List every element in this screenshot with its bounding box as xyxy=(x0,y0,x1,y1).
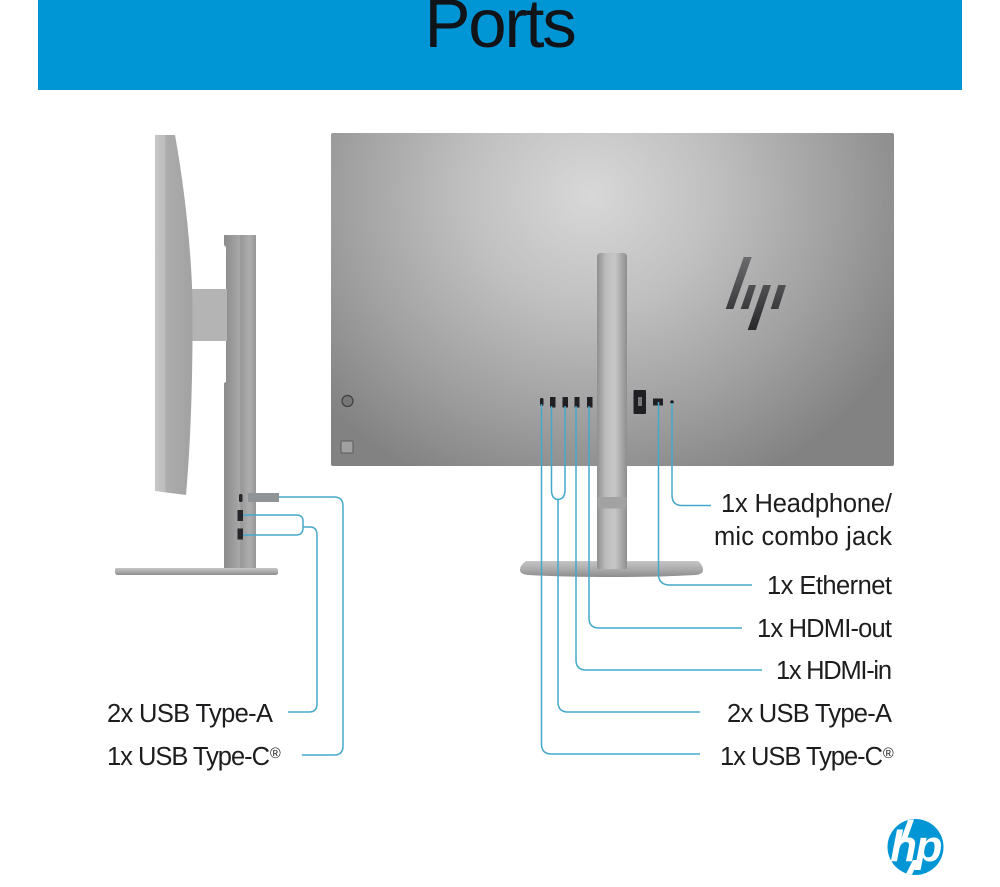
label: rear registered mark: ® xyxy=(883,746,894,762)
label: rear USB Type-A: 2x USB Type-A xyxy=(727,700,892,728)
label: HDMI-in: 1x HDMI-in xyxy=(776,657,892,685)
label: headphone jack: 1x Headphone/ xyxy=(721,490,893,518)
rear view: square mark xyxy=(341,441,353,453)
title banner xyxy=(38,0,962,90)
rear view: collar xyxy=(598,497,626,508)
side view of monitor xyxy=(115,135,279,575)
labels: side view xyxy=(107,700,281,771)
label: side registered mark: ® xyxy=(270,746,281,762)
side view: cable tab xyxy=(248,493,279,502)
side view: display panel xyxy=(155,135,192,495)
hp logo badge: hp xyxy=(890,822,941,871)
side view: stand base xyxy=(115,568,278,575)
rear view: hp mark xyxy=(726,257,786,330)
labels: rear view xyxy=(714,490,894,771)
side view: stand pole xyxy=(224,235,256,568)
label: mic combo jack: mic combo jack xyxy=(714,523,892,551)
label: side USB Type-A: 2x USB Type-A xyxy=(107,700,273,728)
label: side USB Type-C: 1x USB Type-C xyxy=(107,743,270,771)
side view: hinge xyxy=(192,289,227,341)
rear view: ports xyxy=(540,390,674,414)
label: ethernet: 1x Ethernet xyxy=(767,572,892,600)
leader lines: side view xyxy=(243,497,343,755)
rear view: power button xyxy=(342,396,353,406)
rear view of monitor xyxy=(331,133,894,577)
label: rear USB Type-C: 1x USB Type-C xyxy=(720,743,883,771)
side view: ports xyxy=(238,494,243,540)
rear view: display back xyxy=(331,133,894,466)
label: HDMI-out: 1x HDMI-out xyxy=(757,615,892,643)
leader lines: rear view xyxy=(542,402,762,754)
rear view: base xyxy=(520,561,703,577)
rear view: stand pole xyxy=(597,253,627,569)
